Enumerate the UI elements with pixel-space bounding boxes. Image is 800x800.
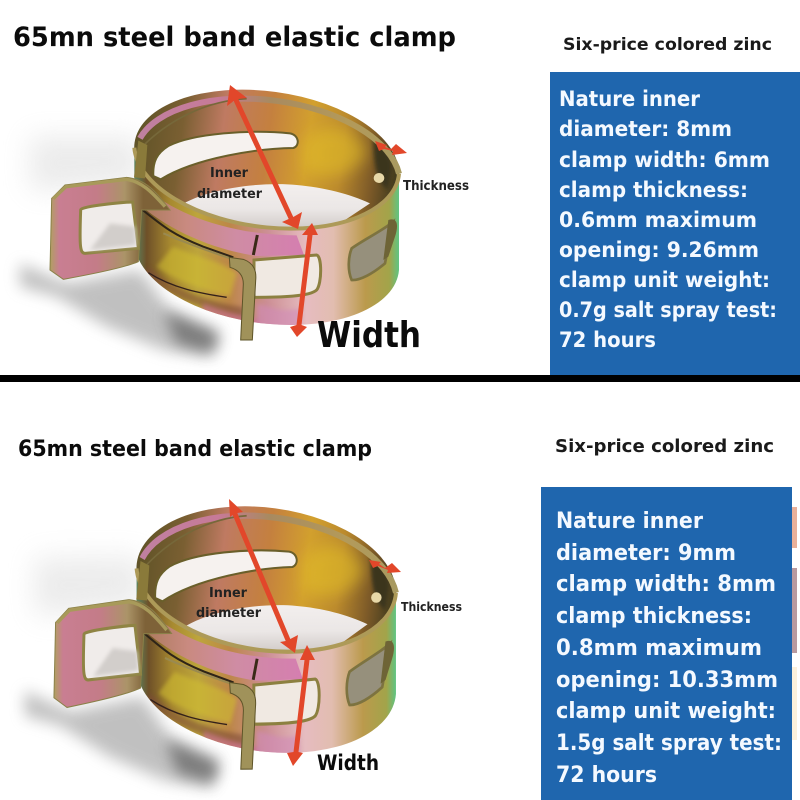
top specification panel: Nature inner [559, 87, 701, 111]
top specification panel: 72 hours [559, 328, 656, 352]
top clamp photo [20, 74, 408, 357]
top inner diameter arrow [227, 85, 302, 229]
bottom specification panel: diameter: 9mm [556, 541, 736, 566]
bottom thickness arrows [369, 560, 401, 573]
top specification panel: clamp thickness: [559, 178, 748, 202]
top specification panel: clamp width: 6mm [559, 148, 770, 172]
top specification panel: diameter: 8mm [559, 117, 732, 141]
top inner diameter label: Inner [210, 166, 249, 181]
bottom inner diameter arrow [229, 499, 298, 653]
top specification panel: opening: 9.26mm [559, 238, 759, 262]
top title: 65mn steel band elastic clamp [13, 22, 456, 53]
bottom width arrow [287, 645, 315, 766]
bottom inner diameter label: Inner [209, 586, 248, 601]
bottom width label: Width [317, 751, 379, 775]
bottom specification panel [541, 487, 792, 800]
top width label: Width [317, 315, 421, 356]
bottom specification panel: 0.8mm maximum [556, 636, 762, 661]
bottom inner diameter label: diameter [196, 606, 262, 621]
bottom specification panel: Nature inner [556, 509, 703, 534]
top width arrow [290, 223, 318, 337]
bottom clamp photo [25, 488, 405, 789]
top inner diameter label [197, 166, 263, 202]
bottom right edge photo slivers [792, 507, 797, 740]
bottom title: 65mn steel band elastic clamp [18, 437, 372, 462]
bottom specification panel: opening: 10.33mm [556, 668, 778, 693]
top finish label: Six-price colored zinc [563, 35, 772, 55]
bottom thickness label: Thickness [401, 600, 462, 614]
bottom finish label: Six-price colored zinc [555, 436, 774, 457]
top specification panel: 0.6mm maximum [559, 208, 757, 232]
bottom specification panel: clamp thickness: [556, 604, 752, 629]
bottom specification panel: clamp unit weight: [556, 699, 776, 724]
bottom specification panel: 1.5g salt spray test: [556, 731, 782, 756]
top specification panel: 0.7g salt spray test: [559, 298, 777, 322]
bottom specification panel: 72 hours [556, 763, 657, 788]
top inner diameter label: diameter [197, 187, 263, 202]
bottom inner diameter label [196, 586, 262, 621]
divider bar [0, 375, 800, 382]
top specification panel: clamp unit weight: [559, 268, 770, 292]
top thickness arrows [375, 141, 407, 155]
top thickness label: Thickness [403, 179, 469, 194]
top specification panel [550, 72, 800, 375]
bottom specification panel: clamp width: 8mm [556, 572, 776, 597]
